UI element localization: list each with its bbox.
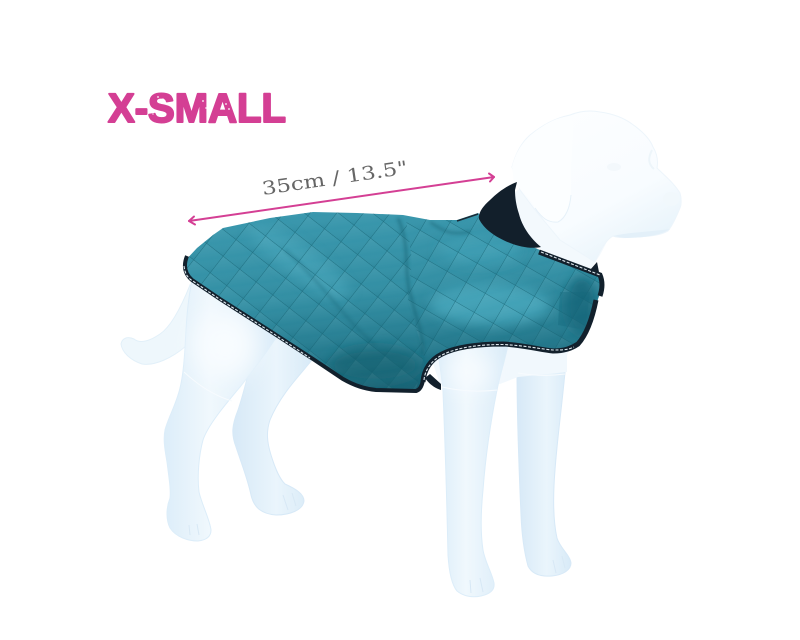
ear bbox=[512, 117, 573, 222]
collar strap bbox=[457, 214, 478, 221]
dog mannequin bbox=[121, 111, 681, 597]
eye bbox=[607, 163, 621, 171]
near hind leg bbox=[164, 280, 278, 541]
brow bbox=[649, 150, 654, 169]
belly edge trim bbox=[423, 300, 596, 382]
under-leg coat flap bbox=[425, 374, 441, 390]
title: X-SMALL bbox=[108, 85, 286, 131]
neck bbox=[512, 180, 612, 270]
quilting and shading bbox=[187, 212, 600, 389]
coat bbox=[180, 182, 610, 395]
ear lower edge bbox=[535, 195, 571, 222]
toes bbox=[189, 493, 565, 593]
head bbox=[512, 111, 681, 262]
thigh highlight bbox=[193, 311, 257, 379]
measurement label: 35cm / 13.5" bbox=[261, 158, 409, 200]
reflective stitching bbox=[184, 252, 600, 380]
far hind leg bbox=[233, 335, 312, 515]
nose bbox=[663, 192, 679, 206]
near front leg bbox=[438, 345, 508, 597]
coat body bbox=[184, 212, 603, 390]
far front leg bbox=[517, 350, 571, 576]
tail bbox=[121, 285, 205, 364]
far side collar strap bbox=[590, 262, 599, 272]
neck trim bbox=[539, 252, 602, 296]
shoulder highlight bbox=[448, 356, 492, 388]
chest and belly bbox=[425, 340, 567, 384]
muzzle shading bbox=[613, 229, 670, 238]
collar bbox=[479, 182, 541, 248]
leg joint seams bbox=[184, 372, 565, 401]
arrow: coat length bbox=[189, 174, 494, 224]
infographic: x-small dog coat sizing bbox=[107, 92, 682, 598]
back edge trim bbox=[185, 256, 423, 391]
